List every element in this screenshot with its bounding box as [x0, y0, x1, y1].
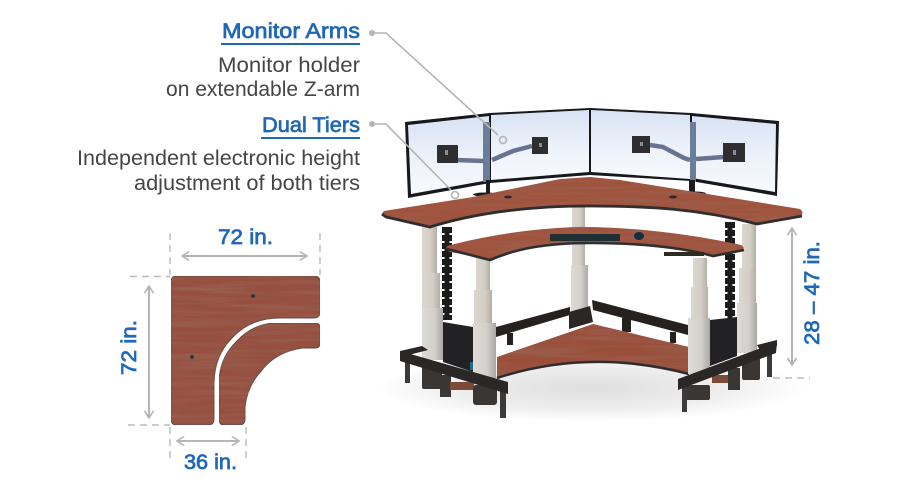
- plan view of desktop: [171, 276, 320, 425]
- dimension: plan width: 72 in.: [218, 225, 273, 249]
- base frame: [400, 340, 777, 394]
- dimension: plan depth: [117, 276, 170, 425]
- monitors: [405, 108, 779, 198]
- dimension: plan width: [170, 225, 320, 275]
- power boxes: [443, 317, 737, 372]
- plan: outer tier: [171, 276, 320, 425]
- monitor arm: right: [632, 122, 745, 196]
- rear outer legs: [422, 224, 757, 360]
- dimension: plan depth: 72 in.: [117, 320, 141, 375]
- description: monitor holder: Monitor holder: [218, 54, 360, 77]
- description: Z-arm: on extendable Z-arm: [166, 78, 360, 101]
- text block: dual tiers: [77, 114, 360, 195]
- leader: dual tiers: [369, 121, 458, 198]
- heading: Dual Tiers: Dual Tiers: [262, 114, 360, 137]
- heading underline: [221, 43, 360, 45]
- description: both tiers: adjustment of both tiers: [134, 172, 360, 195]
- back leg: [571, 205, 588, 313]
- under-frame boxes and feet: [405, 350, 772, 418]
- dimension: overall height: 28 – 47 in.: [800, 241, 824, 345]
- plan: inner tier: [219, 323, 320, 425]
- dimension: tier depth: [170, 427, 246, 474]
- rear shelf rails: [496, 300, 688, 345]
- desk illustration: [375, 108, 805, 422]
- monitor arm: left: [437, 122, 548, 196]
- heading underline: [261, 137, 360, 139]
- lower desk tier: [446, 227, 744, 260]
- floor shadow: [375, 354, 805, 422]
- leader: monitor arms: [369, 30, 506, 144]
- front legs: [473, 258, 710, 378]
- lower shelf: [497, 324, 689, 378]
- top desk tier: [382, 177, 802, 227]
- heading: Monitor Arms: Monitor Arms: [222, 20, 360, 43]
- grommets: [190, 294, 255, 359]
- text block: monitor arms: [166, 20, 360, 101]
- shelf edge: [497, 362, 689, 378]
- description: height adjustment: Independent electronic height: [77, 147, 360, 170]
- dimension: tier depth: 36 in.: [184, 450, 237, 474]
- cable chains: [447, 222, 730, 320]
